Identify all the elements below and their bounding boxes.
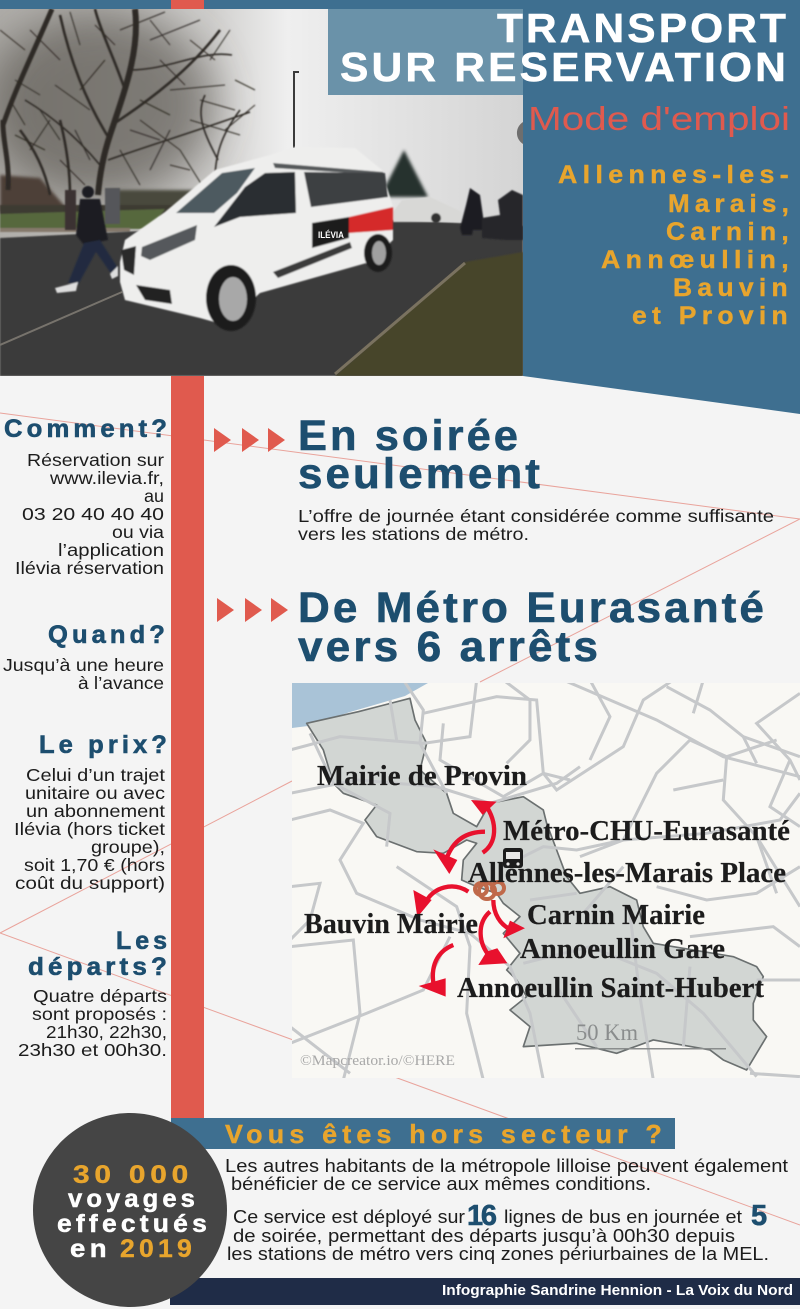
stat circle: 30 000 bbox=[73, 1161, 193, 1189]
footer bbox=[170, 1278, 800, 1305]
section: les départs: 21h30, 22h30, bbox=[46, 1022, 167, 1042]
section: comment: ou via bbox=[112, 522, 164, 542]
section: quand: Quand? bbox=[48, 621, 169, 649]
section: le prix: Celui d’un trajet bbox=[26, 765, 165, 785]
communes list: Bauvin bbox=[673, 274, 793, 302]
title bbox=[340, 5, 789, 90]
photo: shuttle van on street bbox=[0, 9, 523, 376]
communes list: Annœullin, bbox=[601, 246, 794, 274]
text: offre de journée bbox=[298, 506, 774, 544]
heading: en soirée seulement: En soirée bbox=[298, 412, 521, 460]
bare trees bbox=[0, 9, 255, 195]
map labels bbox=[304, 761, 790, 1004]
stat circle: voyages bbox=[68, 1185, 199, 1213]
stat circle bbox=[33, 1113, 227, 1307]
section: le prix: groupe), bbox=[91, 837, 165, 857]
section: le prix: soit 1,70 € (hors bbox=[24, 855, 165, 875]
text: hors secteur: de soirée, permettant des départs jusqu’à 00h30 depuis bbox=[233, 1226, 735, 1246]
section: comment: Réservation sur bbox=[27, 450, 164, 470]
text: hors secteur: bénéficier de ce service aux mêmes conditions. bbox=[231, 1174, 651, 1194]
text: offre de journée: vers les stations de métro. bbox=[298, 524, 529, 544]
stat circle: en bbox=[70, 1235, 111, 1263]
parked car bbox=[393, 197, 462, 223]
section: les départs bbox=[18, 927, 171, 1060]
region bbox=[307, 698, 767, 1070]
map credit: ©Mapcreator.io/©HERE bbox=[300, 1053, 455, 1069]
communes list bbox=[558, 161, 794, 330]
map labels: Allennes-les-Marais Place bbox=[468, 858, 786, 889]
map labels: Métro-CHU-Eurasanté bbox=[503, 816, 790, 847]
title: TRANSPORT bbox=[497, 5, 789, 51]
section: quand bbox=[3, 621, 169, 693]
top bar bbox=[0, 0, 800, 9]
map labels: Carnin Mairie bbox=[527, 900, 705, 931]
grass verge bbox=[335, 252, 523, 376]
section: les départs: Quatre départs bbox=[33, 986, 167, 1006]
banner: hors secteur: Vous êtes hors secteur ? bbox=[225, 1119, 667, 1149]
communes list: et Provin bbox=[632, 302, 793, 330]
stat circle: effectués bbox=[57, 1210, 211, 1238]
grey notch bbox=[517, 122, 523, 144]
heading: de Métro Eurasanté: De Métro Eurasanté bbox=[298, 584, 767, 632]
section: les départs: sont proposés : bbox=[32, 1004, 167, 1024]
icon: Eurasanté interchange rings bbox=[475, 882, 504, 899]
road bbox=[0, 220, 523, 376]
scale bar: 50 Km bbox=[576, 1020, 638, 1045]
text: hors secteur: Les autres habitants de la métropole lilloise peuvent également bbox=[225, 1156, 788, 1176]
title: SUR RESERVATION bbox=[340, 44, 789, 90]
section: comment: www.ilevia.fr, bbox=[49, 468, 164, 488]
photo: shuttle van on street: ILÉVIA bbox=[318, 230, 344, 240]
footer: Infographie Sandrine Hennion - La Voix du Nord bbox=[442, 1283, 793, 1299]
map labels: Annoeullin Saint-Hubert bbox=[457, 973, 765, 1004]
section: le prix: un abonnement bbox=[26, 801, 165, 821]
stat circle: 2019 bbox=[120, 1235, 196, 1263]
text: hors secteur: Ce service est déployé sur bbox=[233, 1207, 465, 1227]
arrows: first heading bbox=[214, 428, 285, 452]
heading: en soirée seulement: seulement bbox=[298, 450, 543, 498]
section: les départs: Les bbox=[116, 927, 171, 955]
communes list: Carnin, bbox=[666, 218, 794, 246]
section: le prix: Ilévia (hors ticket bbox=[14, 819, 165, 839]
blue header panel bbox=[523, 9, 800, 414]
section: le prix: coût du support) bbox=[15, 873, 165, 893]
lamp post bbox=[294, 72, 299, 148]
section: comment: au bbox=[144, 486, 164, 506]
pedestrians bbox=[55, 186, 523, 293]
map labels: Mairie de Provin bbox=[317, 761, 527, 792]
red vertical bar bbox=[171, 376, 204, 1121]
route arrows bbox=[413, 800, 525, 997]
icon: bus bbox=[503, 848, 523, 868]
section: les départs: départs? bbox=[28, 953, 171, 981]
heading: de Métro Eurasanté bbox=[298, 584, 767, 671]
map labels: Annoeullin Gare bbox=[520, 934, 725, 965]
subtitle: Mode d'emploi bbox=[528, 100, 790, 137]
section: quand: Jusqu’à une heure bbox=[3, 655, 164, 675]
section: le prix: Le prix? bbox=[39, 731, 171, 759]
roads bbox=[290, 680, 800, 1080]
communes list: Allennes-les- bbox=[558, 161, 794, 189]
sea bbox=[292, 683, 428, 728]
text: hors secteur: les stations de métro vers cinq zones périurbaines de la MEL. bbox=[227, 1244, 769, 1264]
heading: en soirée seulement bbox=[298, 412, 543, 498]
text: hors secteur: 5 bbox=[751, 1200, 767, 1232]
grass and hedge bbox=[0, 205, 175, 232]
text: hors secteur bbox=[225, 1156, 788, 1264]
title box bbox=[328, 9, 523, 95]
section: comment: l’application bbox=[58, 540, 164, 560]
map labels: Bauvin Mairie bbox=[304, 909, 478, 940]
arrows: second heading bbox=[217, 598, 288, 622]
section: comment: Ilévia réservation bbox=[15, 558, 164, 578]
text: hors secteur: 16 bbox=[467, 1200, 497, 1232]
heading: de Métro Eurasanté: vers 6 arrêts bbox=[298, 623, 601, 671]
section: le prix bbox=[14, 731, 171, 893]
text: offre de journée: L’offre de journée étant considérée comme suffisante bbox=[298, 506, 774, 526]
section: comment: 03 20 40 40 40 bbox=[22, 504, 164, 524]
section: les départs: 23h30 et 00h30. bbox=[18, 1040, 167, 1060]
text: hors secteur: lignes de bus en journée et bbox=[504, 1207, 742, 1227]
van bbox=[120, 147, 393, 331]
section: comment: Comment? bbox=[4, 415, 171, 443]
communes list: Marais, bbox=[668, 190, 794, 218]
section: le prix: unitaire ou avec bbox=[25, 783, 165, 803]
map bbox=[290, 680, 800, 1080]
section: comment bbox=[4, 415, 171, 578]
section: quand: à l’avance bbox=[78, 673, 164, 693]
